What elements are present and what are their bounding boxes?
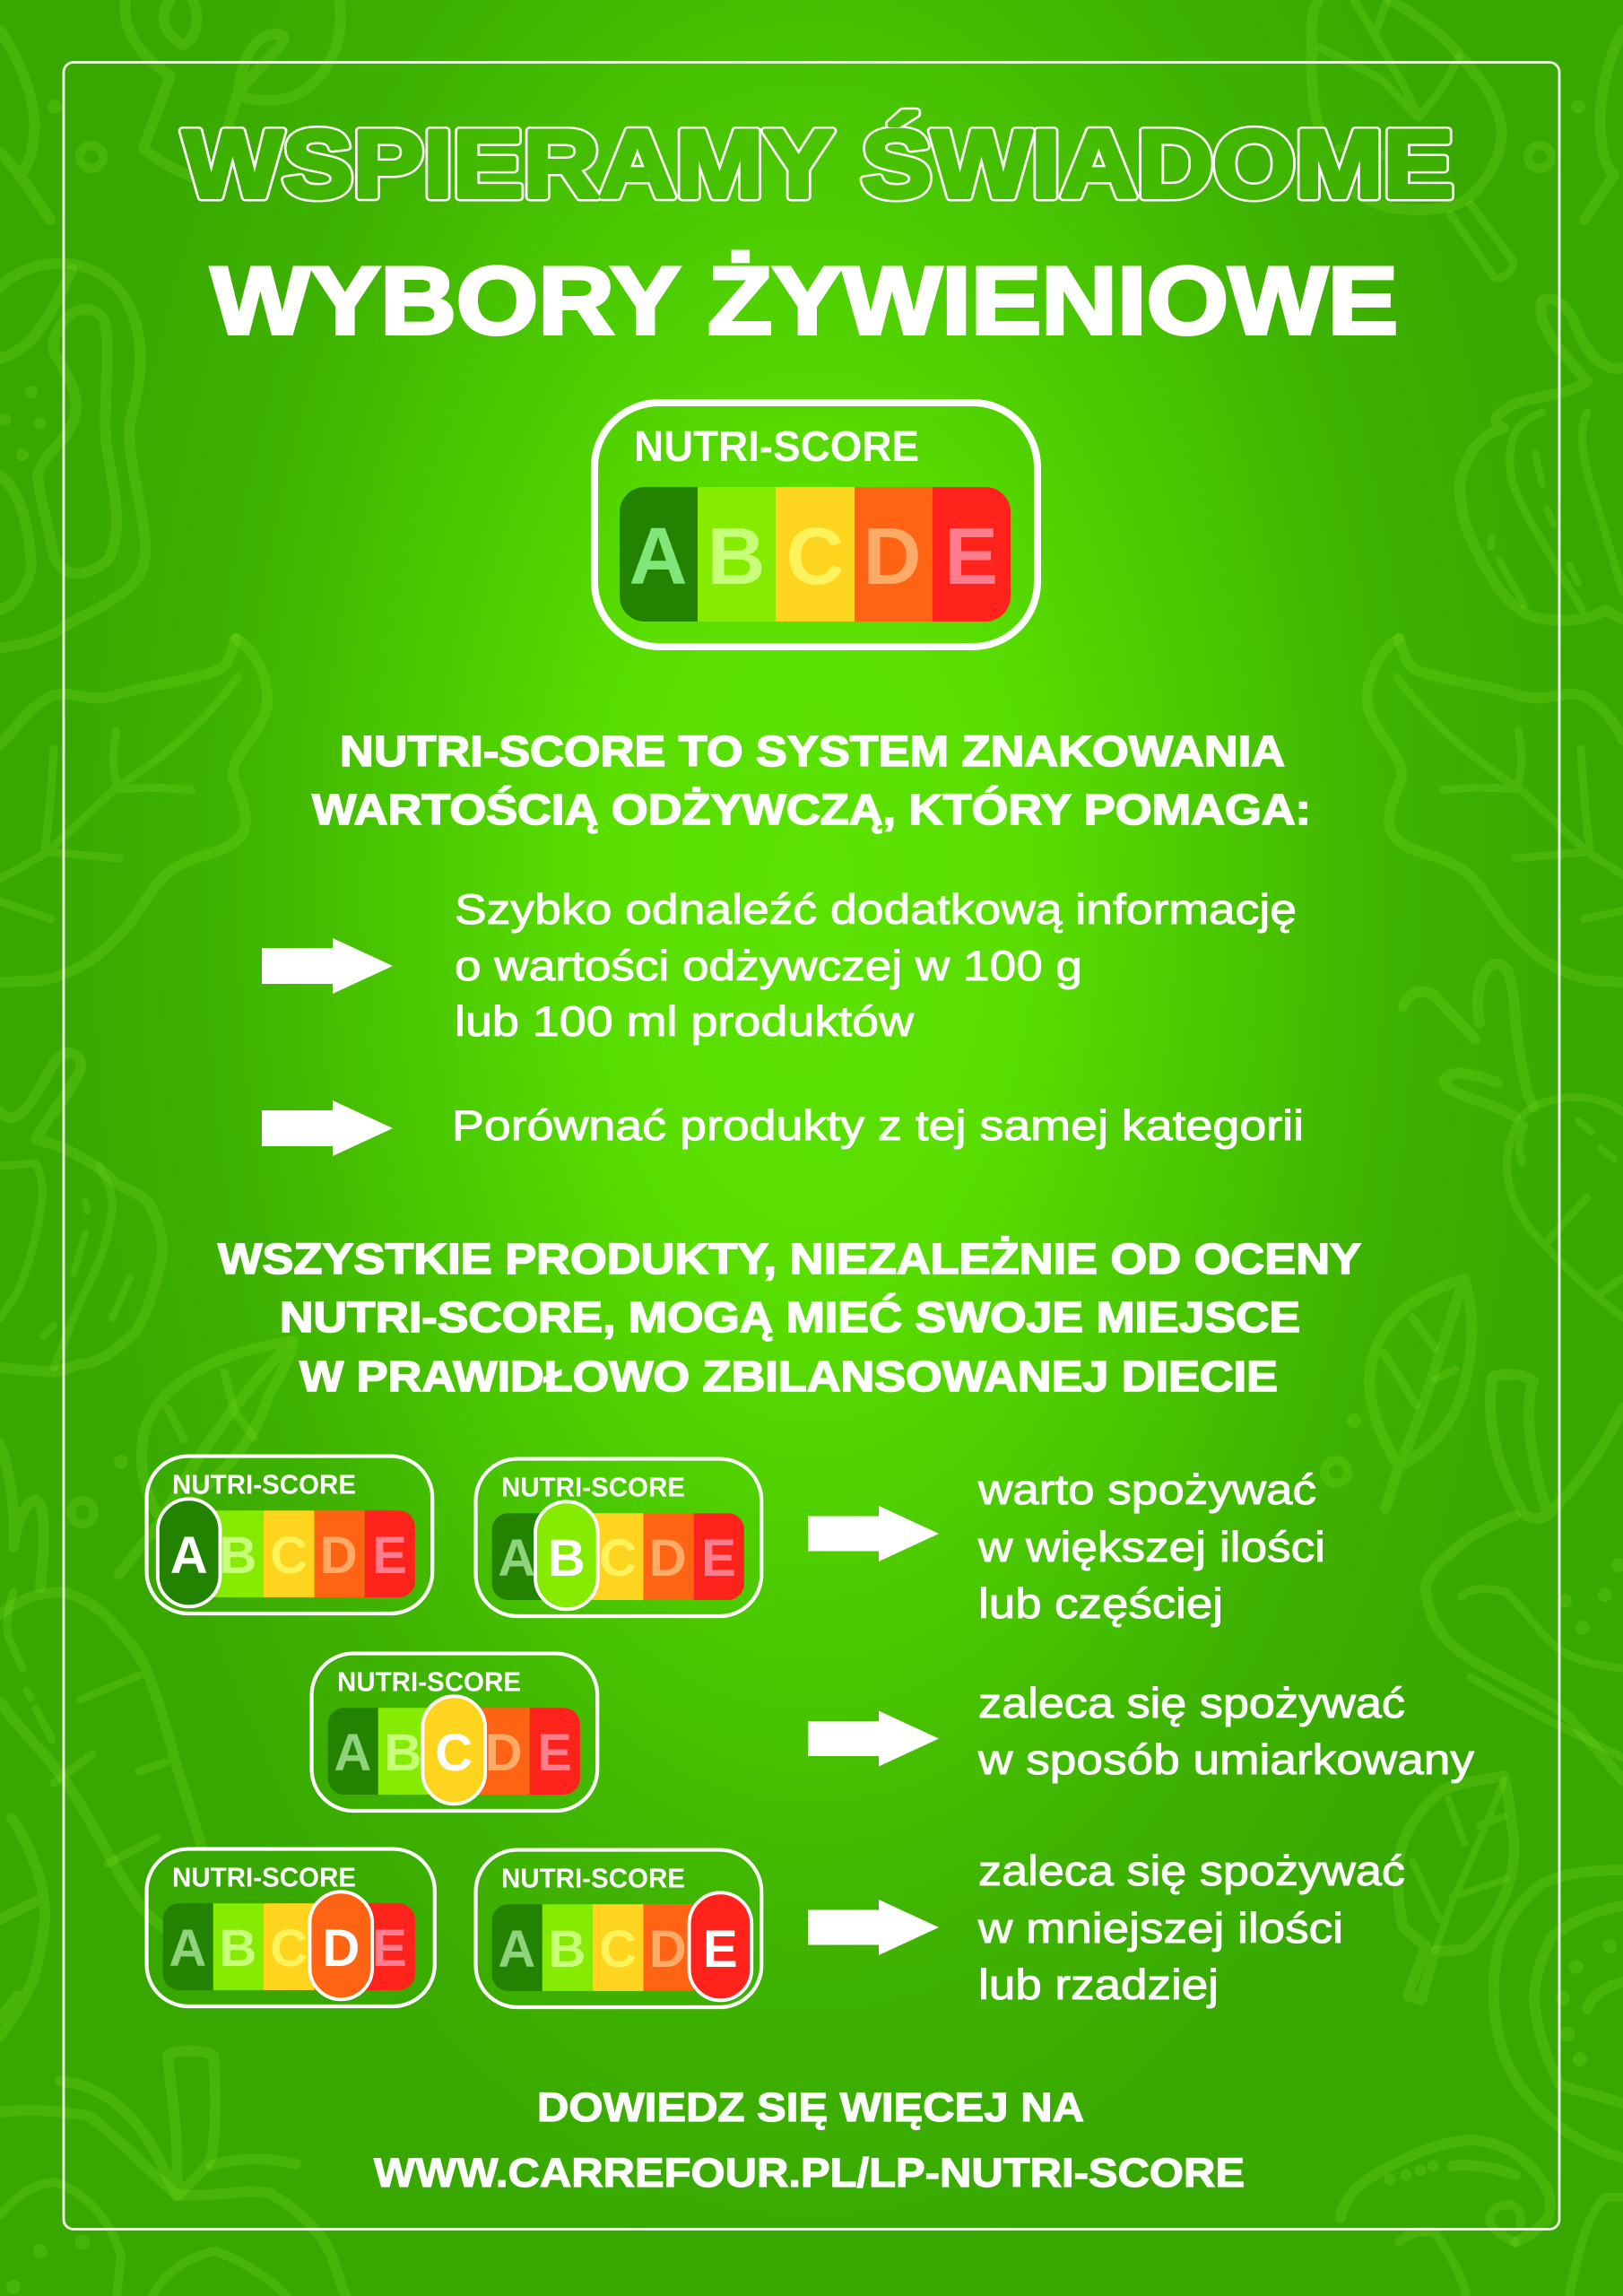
main Nutri-Score badge: E: [944, 512, 998, 602]
main Nutri-Score badge: C: [785, 512, 845, 602]
heading: what Nutri-Score is: NUTRI-SCORE TO SYSTEM ZNAKOWANIA: [340, 728, 1285, 776]
badge: A highlighted: [147, 1457, 432, 1613]
arrow: C: [808, 1711, 939, 1767]
benefit text 1: o wartości odżywczej w 100 g: [455, 942, 1082, 989]
main Nutri-Score badge: [595, 403, 1037, 647]
badge: E highlighted: C: [599, 1920, 637, 1979]
badge: D highlighted: [147, 1849, 435, 2006]
right eggplant: [1490, 1374, 1623, 1518]
left leaf: [0, 639, 267, 982]
bottom left apple: [60, 2051, 215, 2196]
badge: C highlighted: D: [485, 1724, 523, 1782]
advice text: D and E: lub rzadziej: [978, 1961, 1219, 2008]
badge: B highlighted: A: [498, 1529, 535, 1587]
badge: D highlighted: B: [220, 1919, 256, 1978]
badge: D highlighted: C: [270, 1919, 308, 1978]
badge: D highlighted: NUTRI-SCORE: [172, 1862, 356, 1893]
heading: balanced diet: W PRAWIDŁOWO ZBILANSOWANEJ DIECIE: [299, 1353, 1278, 1401]
advice text: A and B: lub częściej: [978, 1579, 1223, 1627]
badge: B highlighted: D: [649, 1529, 687, 1587]
arrow: D and E: [808, 1900, 939, 1955]
advice text: C: [977, 1679, 1475, 1783]
badge: B highlighted: E: [701, 1529, 736, 1587]
main Nutri-Score badge: NUTRI-SCORE: [634, 423, 919, 471]
right small leaf top: [1369, 1279, 1471, 1509]
footer: learn more link: DOWIEDZ SIĘ WIĘCEJ NA: [537, 2084, 1084, 2130]
arrow: A and B: [808, 1506, 939, 1561]
main Nutri-Score badge: D: [863, 512, 922, 602]
badge: E highlighted: NUTRI-SCORE: [501, 1863, 685, 1894]
title: outlined line: WSPIERAMY ŚWIADOME: [183, 109, 1454, 217]
right pepper: [1460, 300, 1623, 621]
advice text: C: zaleca się spożywać: [978, 1679, 1405, 1726]
badge: C highlighted: NUTRI-SCORE: [337, 1666, 521, 1698]
badge: E highlighted: [476, 1850, 761, 2007]
badge: D highlighted: D: [322, 1919, 360, 1978]
arrow 2: [262, 1100, 393, 1156]
arrow 1: [262, 938, 393, 994]
badge: A highlighted: A: [170, 1526, 208, 1585]
badge: A highlighted: NUTRI-SCORE: [172, 1469, 356, 1500]
badge: B highlighted: C: [599, 1529, 637, 1587]
benefit text 2: Porównać produkty z tej samej kategorii: [452, 1101, 1304, 1149]
main Nutri-Score badge: A: [629, 512, 687, 602]
badge: C highlighted: E: [537, 1724, 572, 1782]
badge: B highlighted: NUTRI-SCORE: [501, 1472, 685, 1503]
badge: B highlighted: [476, 1459, 761, 1616]
badge: A highlighted: E: [372, 1526, 407, 1585]
badge: A highlighted: C: [270, 1526, 308, 1585]
badge: B highlighted: B: [548, 1529, 586, 1587]
footer: learn more link: [374, 2084, 1245, 2196]
right leaf bottom: [1398, 1776, 1515, 2000]
badge: C highlighted: [312, 1654, 597, 1811]
title: solid line: WYBORY ŻYWIENIOWE: [211, 247, 1398, 354]
badge: D highlighted: A: [169, 1919, 206, 1978]
badge: C highlighted: B: [385, 1724, 421, 1782]
badge: A highlighted: B: [220, 1526, 256, 1585]
advice text: C: w sposób umiarkowany: [977, 1735, 1475, 1783]
advice text: D and E: zaleca się spożywać: [978, 1847, 1405, 1894]
badge: A highlighted: D: [320, 1526, 358, 1585]
left pepper: [0, 1053, 162, 1372]
heading: what Nutri-Score is: [312, 728, 1311, 834]
badge: E highlighted: E: [703, 1920, 738, 1979]
badge: C highlighted: A: [334, 1724, 371, 1782]
footer: learn more link: WWW.CARREFOUR.PL/LP-NUTRI-SCORE: [374, 2150, 1245, 2196]
advice text: A and B: w większej ilości: [977, 1523, 1325, 1570]
advice text: D and E: w mniejszej ilości: [977, 1904, 1343, 1952]
badge: E highlighted: B: [549, 1920, 586, 1979]
lower left leaf: [119, 1341, 293, 1574]
main Nutri-Score badge: B: [707, 512, 766, 602]
advice text: A and B: warto spożywać: [977, 1465, 1316, 1513]
benefit text 1: Szybko odnaleźć dodatkową informację: [455, 885, 1297, 933]
heading: balanced diet: WSZYSTKIE PRODUKTY, NIEZALEŻNIE OD OCENY: [218, 1236, 1361, 1283]
turnip right: [1403, 964, 1533, 1117]
benefit text 1: [455, 885, 1297, 1045]
heading: balanced diet: [218, 1236, 1361, 1401]
heading: balanced diet: NUTRI-SCORE, MOGĄ MIEĆ SWOJE MIEJSCE: [280, 1292, 1300, 1342]
left carrot: [0, 1444, 44, 1587]
badge: D highlighted: E: [372, 1919, 407, 1978]
badge: E highlighted: D: [649, 1920, 687, 1979]
badge: E highlighted: A: [498, 1920, 535, 1979]
advice text: A and B: [977, 1465, 1325, 1627]
benefit text 1: lub 100 ml produktów: [455, 997, 915, 1045]
bottom right round shape: [1494, 1870, 1623, 2158]
title: outlined line: WSPIERAMY ŚWIADOME: [183, 109, 1454, 217]
badge: C highlighted: C: [435, 1724, 473, 1782]
advice text: D and E: [977, 1847, 1405, 2008]
heading: what Nutri-Score is: WARTOŚCIĄ ODŻYWCZĄ, KTÓRY POMAGA:: [312, 785, 1311, 834]
